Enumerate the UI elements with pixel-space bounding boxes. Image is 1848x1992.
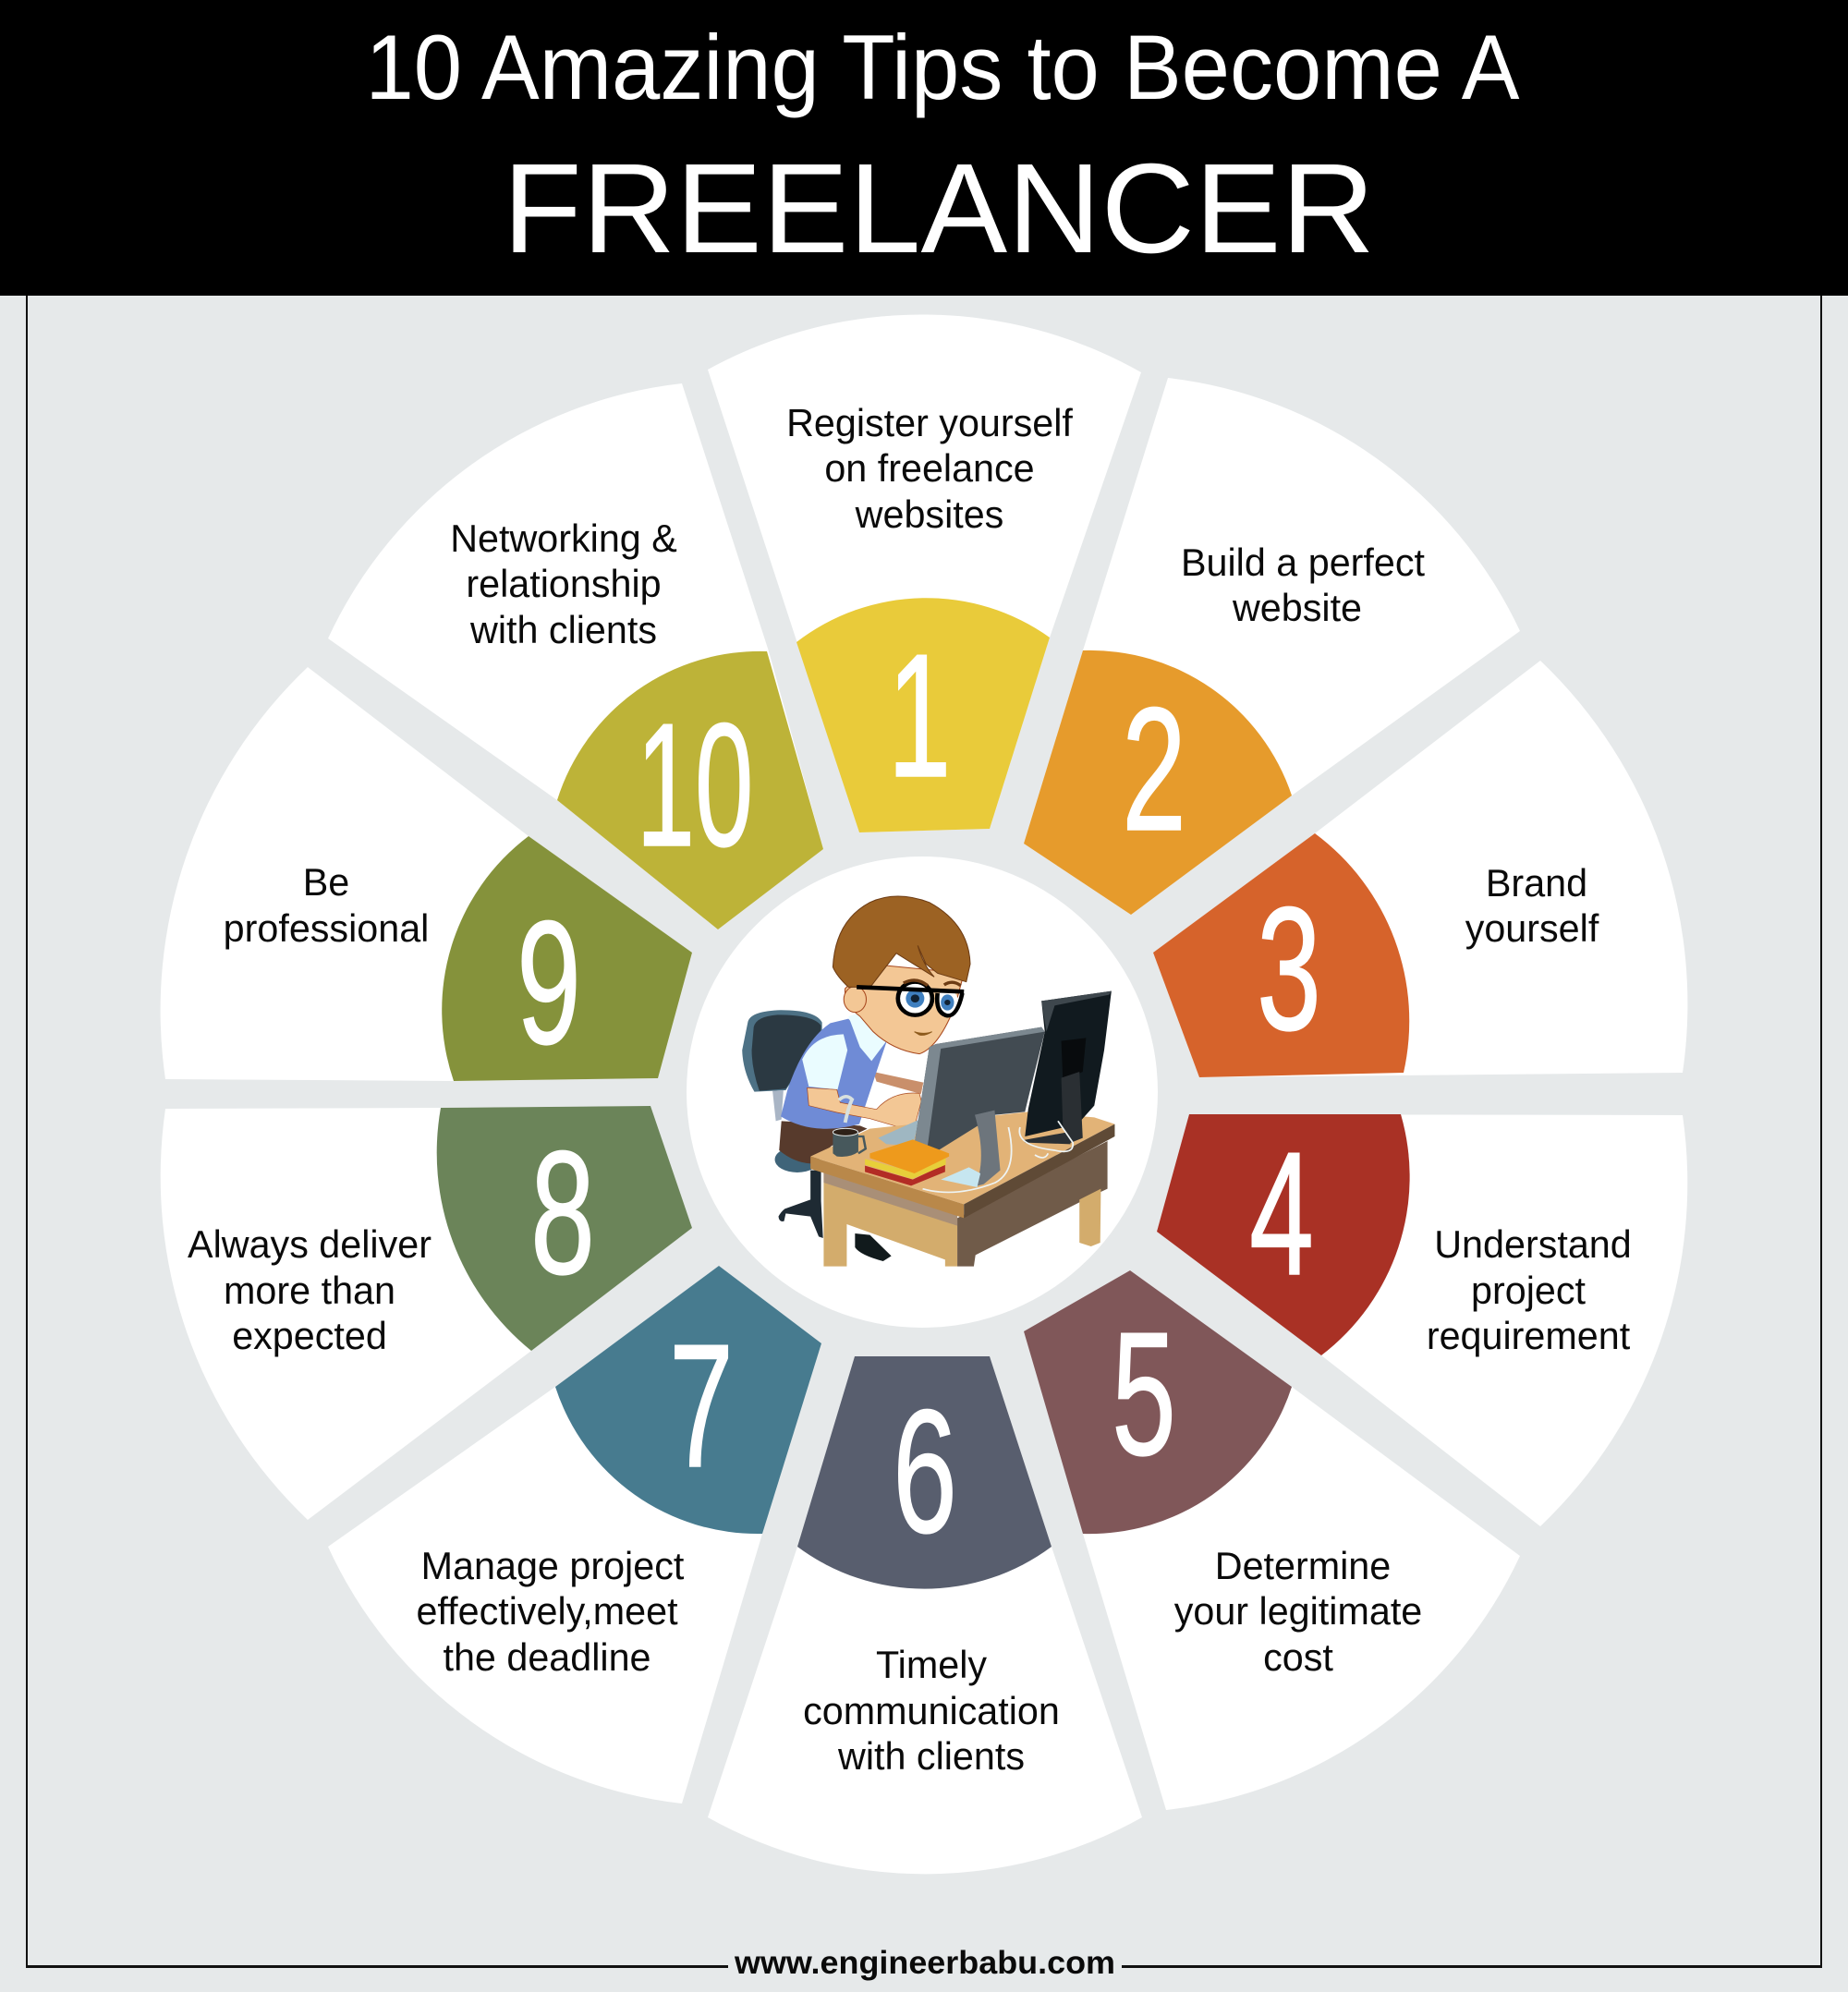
shirt collar bbox=[848, 1013, 887, 1061]
panel: tip 8 bbox=[161, 1106, 692, 1520]
tip 5 text: your legitimate bbox=[1174, 1590, 1422, 1633]
tip 9 number: 9 bbox=[517, 885, 581, 1081]
panel: tip 2 bbox=[1024, 378, 1520, 915]
stack of books bbox=[865, 1139, 949, 1185]
tip 6 text: Timely bbox=[876, 1644, 987, 1686]
tip 5 text: Determine bbox=[1215, 1545, 1391, 1587]
tip 6 text: communication bbox=[803, 1690, 1060, 1732]
tip 8 text: Always deliver bbox=[188, 1223, 432, 1266]
tip 7 text: effectively,meet bbox=[416, 1590, 678, 1633]
tip 10 text: relationship bbox=[466, 563, 662, 605]
tip 4 colour block bbox=[1157, 1114, 1410, 1355]
tip 4 text: Understand bbox=[1434, 1223, 1632, 1266]
panel: tip 5 bbox=[1024, 1270, 1520, 1810]
knitted vest bbox=[781, 1019, 887, 1129]
panel: tip 1 bbox=[708, 314, 1141, 832]
tip 8 text: expected bbox=[232, 1315, 387, 1357]
tip 7 text: Manage project bbox=[421, 1545, 685, 1587]
tip 5 colour block bbox=[1024, 1270, 1292, 1534]
tip 6 colour block bbox=[797, 1356, 1052, 1589]
eyebrows bbox=[904, 980, 961, 986]
tip 1 colour block bbox=[796, 598, 1050, 832]
chair bbox=[742, 1010, 823, 1238]
tip 7 text: the deadline bbox=[443, 1636, 651, 1679]
tip 4 text: project bbox=[1471, 1269, 1587, 1312]
tip 4 number: 4 bbox=[1249, 1116, 1314, 1312]
arm and hand bbox=[808, 1087, 921, 1129]
mouse pad bbox=[941, 1167, 980, 1187]
trousers bbox=[779, 1121, 868, 1163]
tip 5 number: 5 bbox=[1112, 1296, 1176, 1492]
header band with title bbox=[0, 0, 1848, 296]
tip 1 text: websites bbox=[855, 493, 1003, 536]
panel: tip 6 bbox=[708, 1356, 1142, 1874]
hair bbox=[833, 896, 970, 987]
tip 1 text: on freelance bbox=[824, 447, 1035, 490]
tip 10 text: Networking & bbox=[450, 517, 677, 560]
tip 1 number: 1 bbox=[888, 617, 951, 813]
panel: tip 9 bbox=[161, 667, 692, 1081]
tip 9 text: professional bbox=[224, 907, 429, 950]
tip 9 colour block bbox=[442, 836, 692, 1081]
title line one: 10 Amazing Tips to Become A bbox=[366, 16, 1519, 118]
tip 6 text: with clients bbox=[837, 1735, 1025, 1778]
centre circle bbox=[687, 856, 1158, 1328]
ear bbox=[844, 987, 866, 1013]
panel: tip 3 bbox=[1153, 661, 1687, 1077]
website footer: www.engineerbabu.com bbox=[734, 1945, 1115, 1981]
head bbox=[845, 964, 964, 1054]
tip 10 number: 10 bbox=[637, 687, 753, 883]
tip 4 text: requirement bbox=[1427, 1315, 1631, 1357]
tip 2 text: Build a perfect bbox=[1181, 541, 1426, 584]
mouth bbox=[915, 1032, 932, 1035]
tip 3 number: 3 bbox=[1257, 871, 1321, 1067]
keyboard bbox=[878, 1120, 919, 1146]
tip 10 colour block bbox=[557, 651, 823, 929]
shoe bbox=[855, 1233, 892, 1261]
tip 8 number: 8 bbox=[530, 1115, 595, 1311]
tip 3 colour block bbox=[1153, 833, 1409, 1077]
tip 5 text: cost bbox=[1263, 1636, 1333, 1679]
glasses and eyes bbox=[857, 980, 964, 1035]
panel: tip 10 bbox=[328, 383, 823, 929]
panel: tip 7 bbox=[328, 1266, 821, 1804]
far arm bbox=[873, 1072, 923, 1094]
tip 7 number: 7 bbox=[669, 1308, 734, 1504]
shirt sleeve bbox=[802, 1034, 847, 1089]
tip 3 text: Brand bbox=[1486, 862, 1587, 905]
tip 10 text: with clients bbox=[469, 609, 657, 651]
tip 7 colour block bbox=[555, 1266, 821, 1534]
coffee mug bbox=[833, 1128, 866, 1157]
tip 2 number: 2 bbox=[1122, 672, 1186, 868]
tip 3 text: yourself bbox=[1465, 907, 1599, 950]
steam bbox=[839, 1097, 852, 1123]
illustration: freelancer at desk bbox=[742, 896, 1114, 1267]
right monitor bbox=[1023, 991, 1112, 1144]
tip 2 text: website bbox=[1232, 587, 1362, 629]
title line two: FREELANCER bbox=[503, 138, 1375, 280]
tip 8 text: more than bbox=[224, 1269, 395, 1312]
cables bbox=[923, 1121, 1073, 1192]
tip 2 colour block bbox=[1024, 650, 1292, 915]
desk bbox=[810, 1111, 1114, 1267]
tip 1 text: Register yourself bbox=[786, 402, 1073, 444]
tip 6 number: 6 bbox=[893, 1374, 957, 1570]
main monitor bbox=[913, 1027, 1045, 1186]
panel: tip 4 bbox=[1157, 1114, 1687, 1526]
tip 8 colour block bbox=[437, 1106, 692, 1351]
tip 9 text: Be bbox=[303, 861, 349, 904]
